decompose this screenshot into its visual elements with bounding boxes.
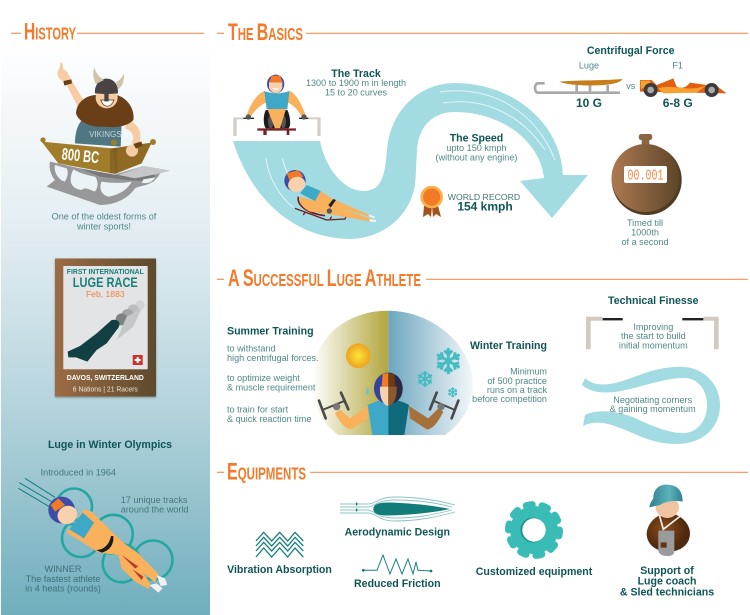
text: oldest forms caption: winter sports! xyxy=(76,222,131,232)
text: summer training: to train for start xyxy=(227,404,289,414)
text: timed till: 1000th xyxy=(631,228,659,238)
text: winner: WINNER xyxy=(45,564,82,574)
icon: small snowflake xyxy=(448,387,458,397)
icon: medium snowflake xyxy=(417,371,433,387)
summer half xyxy=(312,311,388,435)
text: the speed xyxy=(436,132,517,162)
text: the track xyxy=(306,68,406,98)
text: negotiating corners: & gaining momentum xyxy=(610,404,696,414)
label: aerodynamic design: Aerodynamic Design xyxy=(345,526,450,538)
icon: vibration zigzag xyxy=(256,532,303,557)
athlete from above xyxy=(18,478,167,593)
sliding athlete on sled xyxy=(266,158,376,222)
text: negotiating corners: Negotiating corners xyxy=(613,395,693,405)
label: luge: Luge xyxy=(579,60,599,70)
athlete with dumbbells xyxy=(319,373,458,435)
heading: technical finesse: Technical Finesse xyxy=(608,295,699,307)
text: 17 unique tracks: around the world xyxy=(121,504,188,514)
heading: History: HISTORY xyxy=(24,18,76,45)
icon: medal xyxy=(420,186,443,217)
icon: sled runners xyxy=(47,162,170,205)
label: support of coach: Luge coach xyxy=(638,576,696,588)
icon: stopwatch: 00.001 xyxy=(628,168,664,184)
heading: centrifugal force: Centrifugal Force xyxy=(587,45,675,57)
text: winter training xyxy=(470,340,547,404)
text: world record: WORLD RECORD xyxy=(448,192,520,202)
text: introduced in 1964: Introduced in 1964 xyxy=(41,468,116,478)
text: the track: 1300 to 1900 m in length xyxy=(306,78,406,88)
poster: first international luge race: Feb, 1883 xyxy=(86,289,125,299)
text: summer training: & quick reaction time xyxy=(227,414,311,424)
icon: coach xyxy=(647,485,690,556)
text: improving the start: initial momentum xyxy=(619,340,688,350)
stat: 10 G: 10 G xyxy=(576,96,602,110)
label: vibration absorption: Vibration Absorption xyxy=(227,564,332,576)
poster: swiss flag xyxy=(133,355,143,365)
text: winter training: Minimum xyxy=(510,366,547,376)
poster: first international luge race: LUGE RACE xyxy=(73,274,138,290)
sled box: 800 BC xyxy=(61,144,100,167)
icon: aerodynamic airfoil xyxy=(340,497,455,521)
label: support of coach: & Sled technicians xyxy=(620,586,714,598)
olympic rings xyxy=(56,488,172,582)
text: summer training: & muscle requirement xyxy=(227,382,316,392)
label: f1: F1 xyxy=(672,60,683,70)
text: summer training: high centrifugal forces. xyxy=(227,353,318,363)
text: oldest forms caption: One of the oldest forms of xyxy=(52,212,157,222)
text: world record: 154 kmph xyxy=(457,200,513,214)
poster: first international luge race xyxy=(55,258,156,396)
text: winter training: of 500 practice xyxy=(487,376,547,386)
icon: large snowflake xyxy=(435,348,462,374)
text: summer training: to optimize weight xyxy=(227,373,300,383)
illustration: viking on sled xyxy=(40,63,156,174)
text: the speed: (without any engine) xyxy=(436,152,517,162)
text: the track: The Track xyxy=(331,68,381,80)
panel: history background xyxy=(1,42,210,615)
icon: friction spring xyxy=(362,555,432,574)
heading: A Successful Luge Athlete: A SUCCESSFUL LUGE ATHLETE xyxy=(228,265,421,292)
text: improving the start: the start to build xyxy=(621,331,686,341)
stat: 6-8 G: 6-8 G xyxy=(663,96,693,110)
text: winter training: Winter Training xyxy=(470,340,547,352)
text: the speed: The Speed xyxy=(450,132,503,144)
text: winner: The fastest athlete xyxy=(26,574,100,584)
text: winner: in 4 heats (rounds) xyxy=(25,584,101,594)
heading: Luge in Winter Olympics: Luge in Winter Olympics xyxy=(48,439,172,451)
text: winter training: before competition xyxy=(472,394,547,404)
viking: VIKINGS xyxy=(89,130,122,139)
label: vs: vs xyxy=(626,81,636,91)
text: timed till: of a second xyxy=(621,237,669,247)
text: summer training: Summer Training xyxy=(227,326,314,338)
icon: F1 car xyxy=(640,78,727,97)
poster: sled silhouette xyxy=(68,300,145,362)
icon: luge sled xyxy=(535,79,623,93)
text: improving the start: Improving xyxy=(633,322,673,332)
icon: start handles xyxy=(586,317,719,349)
text: summer training xyxy=(227,326,318,424)
text: the speed: upto 150 kmph xyxy=(446,143,507,153)
track curve xyxy=(582,367,720,444)
icon: sun xyxy=(346,343,371,368)
text: the track: 15 to 20 curves xyxy=(325,88,388,98)
label: reduced friction: Reduced Friction xyxy=(354,578,441,590)
text: 17 unique tracks: 17 unique tracks xyxy=(121,495,188,505)
text: winter training: runs on a track xyxy=(487,385,547,395)
track with arrow xyxy=(233,83,588,239)
poster: first international luge race: FIRST INTERNATIONAL xyxy=(67,267,144,276)
poster: first international luge race: 6 Nations | 21 Racers xyxy=(73,386,138,393)
text: timed till: Timed till xyxy=(627,218,663,228)
poster: first international luge race: DAVOS, SWITZERLAND xyxy=(67,373,144,382)
text: summer training: to withstand xyxy=(227,344,276,354)
start handles with athlete xyxy=(233,75,321,136)
label: customized equipment: Customized equipment xyxy=(476,566,593,578)
text: world record xyxy=(448,192,520,214)
icon: gear xyxy=(508,504,560,556)
heading: The Basics: THE BASICS xyxy=(228,19,303,46)
label: support of coach: Support of xyxy=(640,565,694,577)
winter half xyxy=(388,311,473,435)
heading: Equipments: EQUIPMENTS xyxy=(227,458,306,486)
illustration: summer and winter training dome xyxy=(312,311,473,435)
icon: stopwatch xyxy=(612,134,682,215)
